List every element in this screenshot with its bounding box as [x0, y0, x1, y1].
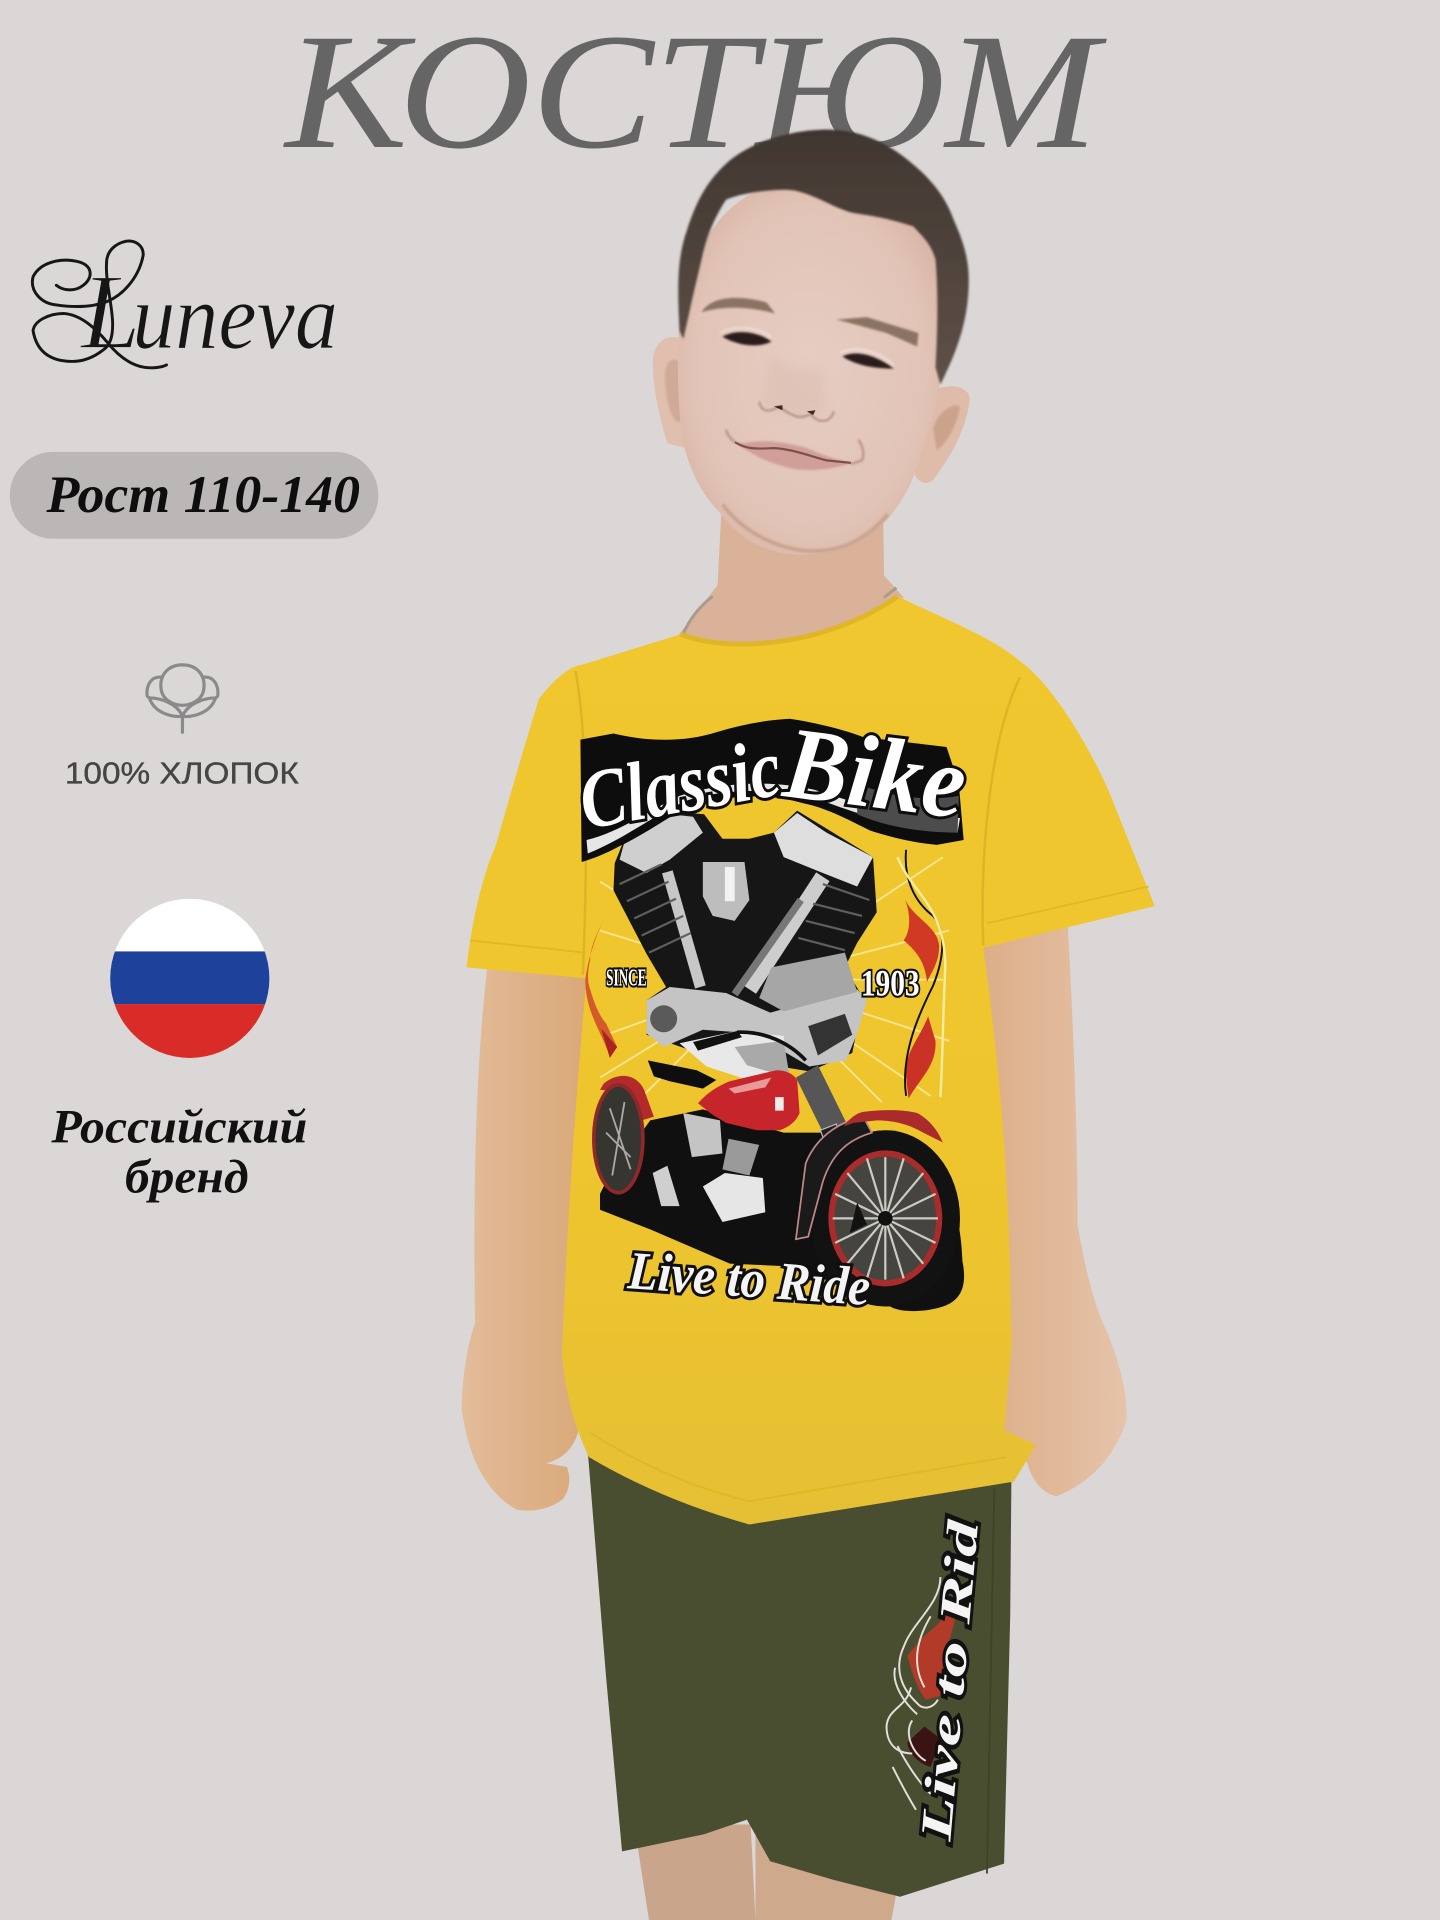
brand origin text — [50, 1100, 307, 1204]
banner text: Bike: Bike — [777, 705, 972, 841]
hair — [678, 130, 969, 384]
right arm and hand — [980, 918, 1127, 1496]
banner text: Classic: Classic — [573, 722, 788, 848]
icon: Russian flag — [110, 898, 270, 1058]
right ear — [913, 386, 970, 483]
shirt print: banner — [573, 705, 972, 862]
infographic canvas — [10, 38, 1155, 1920]
height pill: Рост 110-140 — [46, 466, 360, 524]
brand origin text: Российский — [50, 1100, 307, 1153]
print text: since: SINCE — [606, 965, 647, 992]
height pill — [10, 452, 378, 539]
title: КОСТЮМ — [283, 0, 1108, 183]
shorts print: flame and slogan — [887, 1517, 988, 1844]
shorts — [588, 1451, 1011, 1897]
shirt print: flames — [585, 850, 945, 1098]
shirt print: sunburst — [600, 857, 949, 1102]
face — [678, 184, 942, 555]
shirt print: engine — [613, 811, 877, 1071]
cotton label: 100% ХЛОПОК — [65, 757, 299, 791]
t-shirt — [467, 596, 1155, 1524]
brand logo: Luneva: uneva — [132, 266, 338, 369]
left arm and hand — [462, 967, 590, 1511]
shirt print: motorcycle — [594, 1031, 964, 1311]
print text: live to ride: Live to Ride — [625, 1240, 872, 1317]
brand origin text: бренд — [125, 1151, 249, 1204]
left ear — [653, 337, 686, 448]
icon: cotton boll — [147, 665, 218, 732]
brand logo: Luneva: L — [79, 253, 141, 372]
print text: 1903: 1903 — [861, 963, 920, 1004]
neck — [677, 496, 904, 646]
facial features — [702, 298, 918, 551]
necklace — [682, 588, 896, 637]
legs — [634, 1824, 900, 1920]
boy figure — [462, 130, 1155, 1920]
shorts print: flame and slogan: Live to Rid — [911, 1517, 988, 1844]
brand logo: Luneva — [32, 241, 338, 372]
